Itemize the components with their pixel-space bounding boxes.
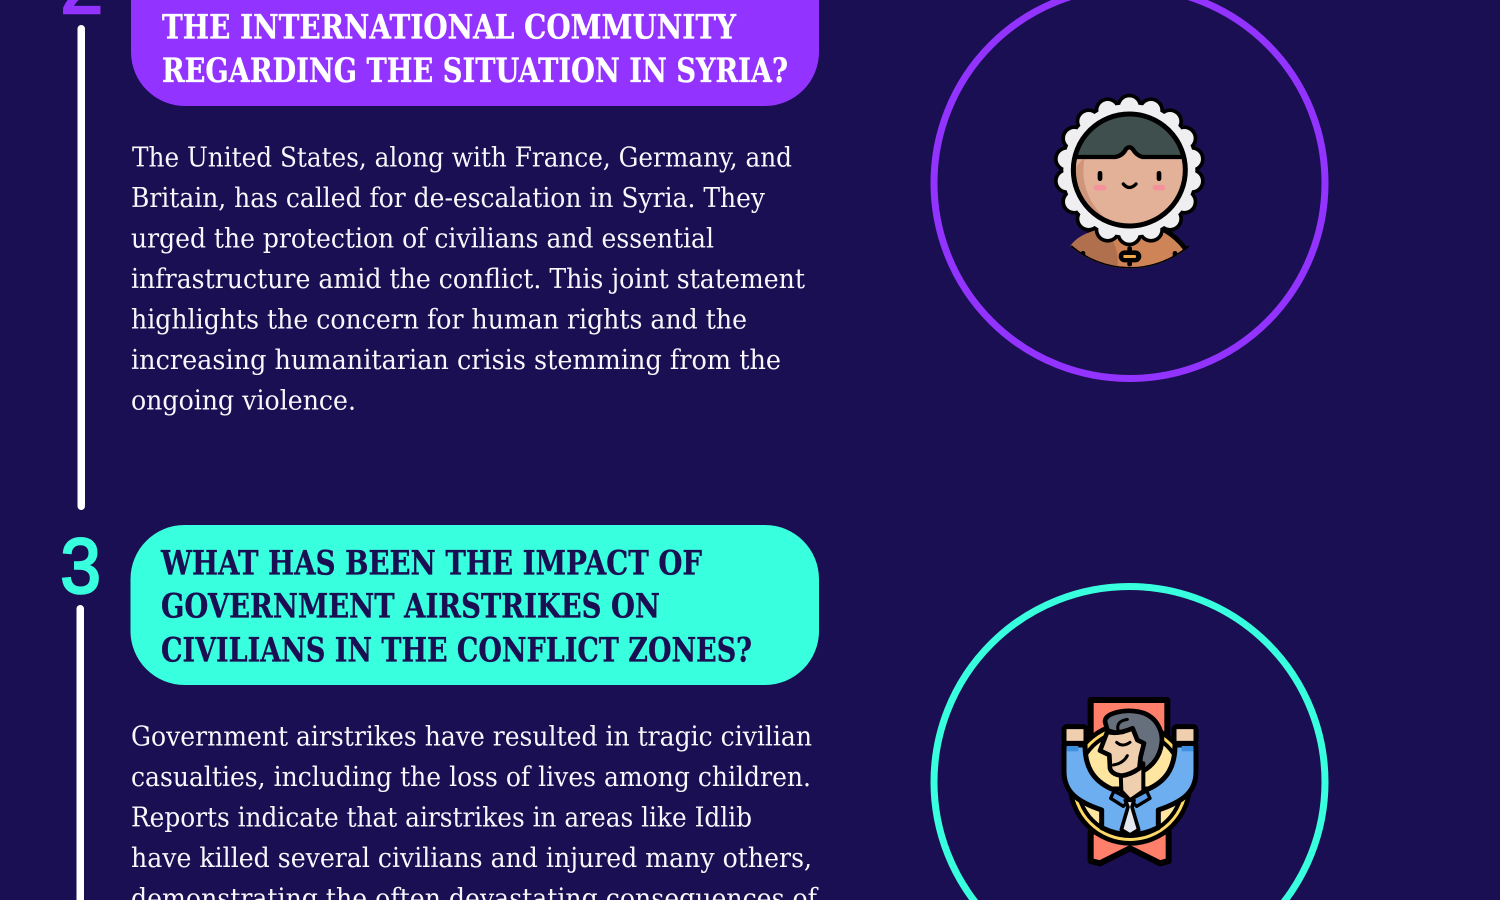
- section 3 heading panel: WHAT HAS BEEN THE IMPACT OF: [160, 544, 702, 582]
- collar: [1111, 791, 1150, 806]
- medal: [1070, 723, 1190, 843]
- face: [1073, 114, 1185, 226]
- face: [1100, 728, 1144, 776]
- fur outer: [1054, 94, 1205, 246]
- section 2 body text: The United States, along with France, Germany, and: [132, 142, 792, 174]
- section 2 timeline bar: [78, 25, 85, 510]
- section 2 body text: [131, 142, 805, 416]
- section 2 body text: increasing humanitarian crisis stemming from the: [131, 344, 781, 376]
- smile: [1123, 184, 1136, 187]
- section 3 timeline bar: [76, 605, 84, 900]
- section 3 body text: casualties, including the loss of lives among children.: [131, 761, 811, 793]
- hair: [1077, 116, 1182, 160]
- section 2 heading panel: THE INTERNATIONAL COMMUNITY: [162, 8, 737, 46]
- section 2 body text: ongoing violence.: [131, 384, 356, 416]
- section 3 body text: [131, 720, 819, 900]
- section 3 body text: Government airstrikes have resulted in tragic civilian: [131, 720, 812, 752]
- hands: [1064, 727, 1086, 743]
- section 2 body text: infrastructure amid the conflict. This joint statement: [131, 263, 805, 295]
- section 3 body text: have killed several civilians and injured many others,: [131, 842, 812, 874]
- tie: [1121, 800, 1139, 835]
- neck: [1121, 763, 1143, 800]
- section 2 heading panel: [131, 0, 819, 106]
- section 3 number: 3: [60, 522, 101, 609]
- section 2 body text: highlights the concern for human rights and the: [131, 304, 747, 336]
- section 3 heading panel: [130, 525, 819, 685]
- section 2 heading panel: REGARDING THE SITUATION IN SYRIA?: [162, 51, 788, 90]
- ribbon: [1091, 700, 1167, 752]
- cheeks: [1094, 185, 1106, 190]
- icon: man with raised arms on a ribbon badge: [1064, 700, 1196, 863]
- icon: child in fur hood: [1054, 94, 1205, 275]
- eyes: [1098, 171, 1102, 181]
- section 3 body text: Reports indicate that airstrikes in areas like Idlib: [131, 802, 752, 834]
- section 3 heading panel: CIVILIANS IN THE CONFLICT ZONES?: [161, 630, 752, 670]
- section 3 heading panel: GOVERNMENT AIRSTRIKES ON: [161, 586, 660, 626]
- section 2 body text: urged the protection of civilians and essential: [131, 222, 714, 254]
- section 2 icon ring: [934, 0, 1325, 378]
- arms and torso: [1064, 745, 1196, 835]
- section 3 icon ring: [934, 586, 1325, 900]
- section 2 body text: Britain, has called for de-escalation in Syria. They: [131, 182, 765, 214]
- hair: [1105, 711, 1162, 771]
